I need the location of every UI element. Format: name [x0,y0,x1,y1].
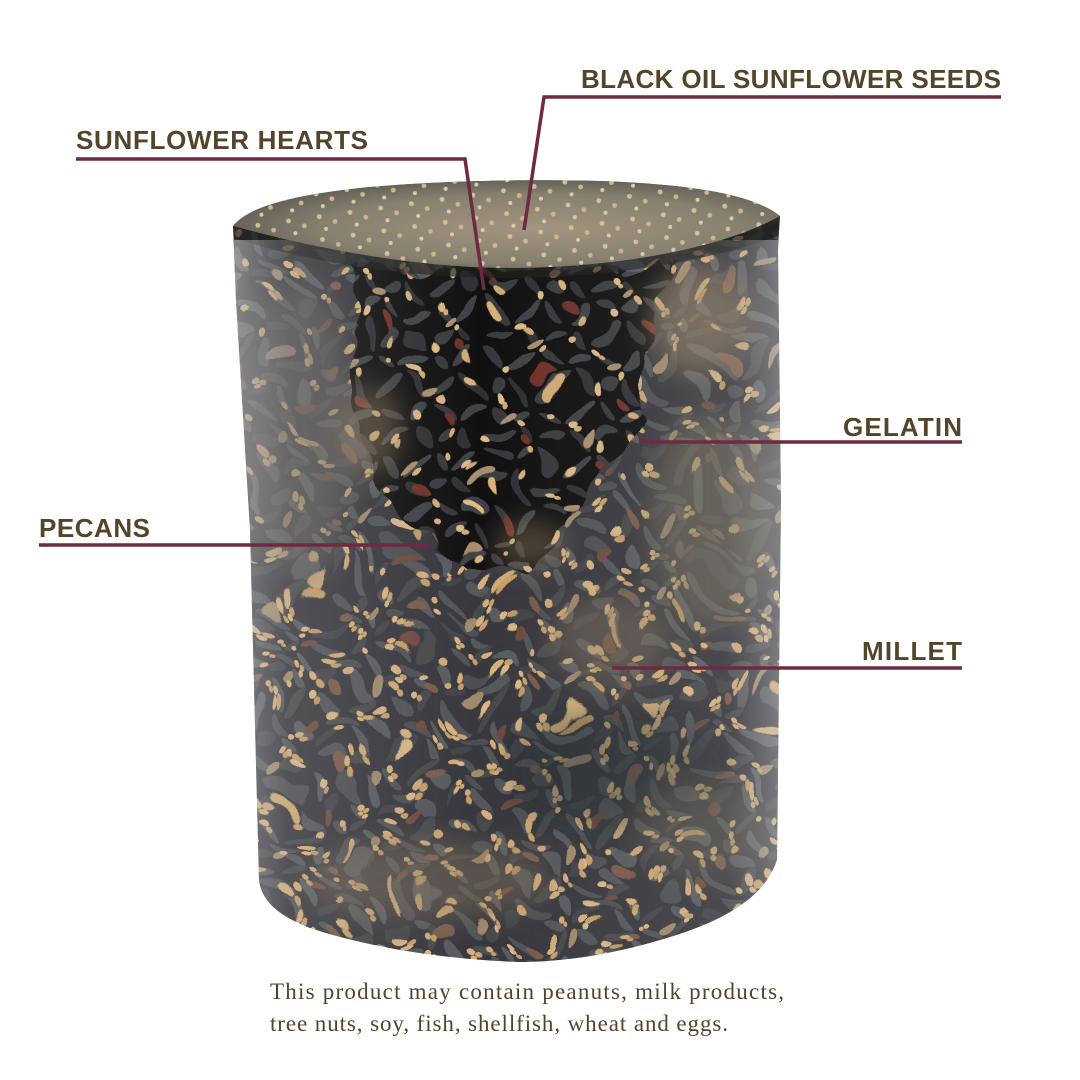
callout: pecans: PECANS [39,513,150,543]
callout: millet: MILLET [862,636,962,666]
callout: sunflower hearts [76,125,484,290]
tonal blotches [245,280,770,920]
allergen note [270,979,784,1036]
callout: gelatin: GELATIN [843,412,962,442]
allergen note: tree nuts, soy, fish, shellfish, wheat and eggs. [270,1011,728,1036]
callout: black oil sunflower seeds: BLACK OIL SUNFLOWER SEEDS [581,64,1001,94]
plastic wrap haze [234,240,781,962]
dark exposed seed area [340,258,750,575]
allergen note: This product may contain peanuts, milk products, [270,979,784,1004]
product: seed cylinder [233,180,781,962]
callout: black oil sunflower seeds [524,64,1001,230]
callout: sunflower hearts: SUNFLOWER HEARTS [76,125,368,155]
cylinder top [233,180,780,278]
